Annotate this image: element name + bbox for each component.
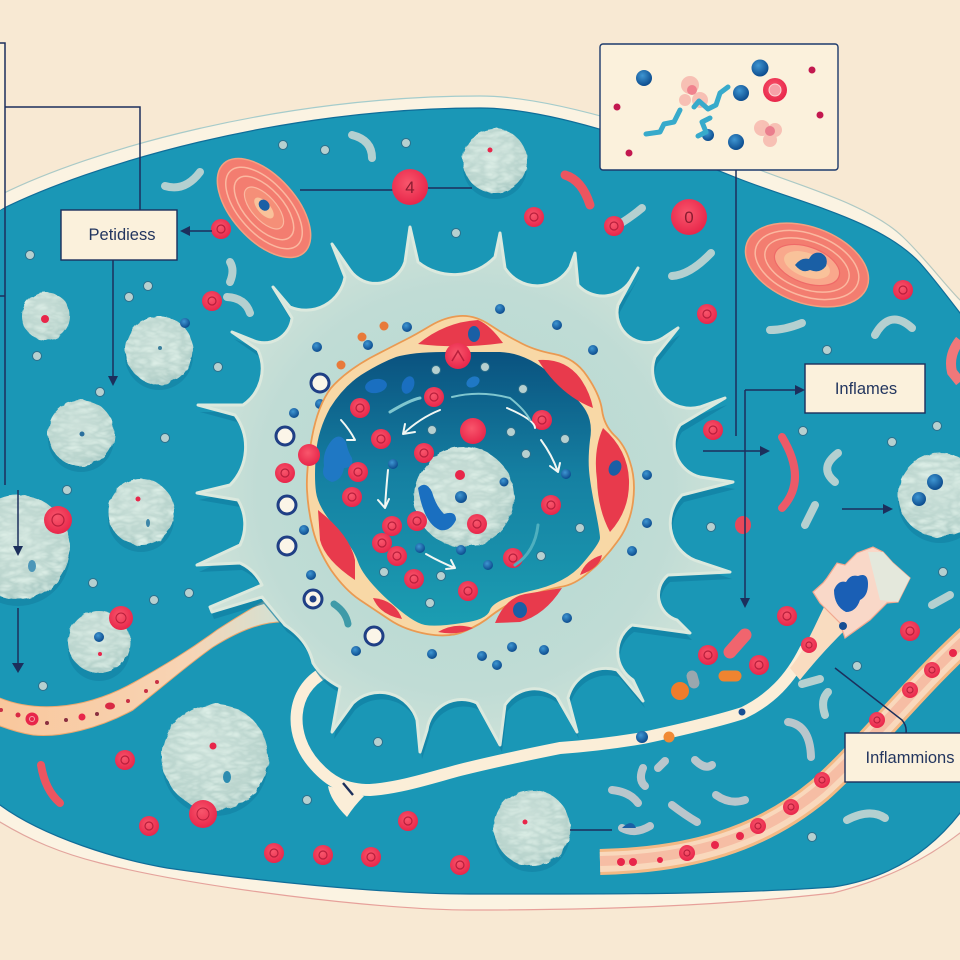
red organelles in ring bbox=[318, 320, 629, 633]
pink disc right bbox=[734, 207, 880, 323]
pink disc left bbox=[200, 142, 328, 274]
label: Petidiess: Petidiess bbox=[89, 226, 155, 244]
dots and rings on cell body bbox=[275, 304, 652, 670]
nucleus ring bbox=[307, 316, 634, 635]
label: Inflames bbox=[805, 364, 925, 413]
white blood cells bbox=[0, 129, 960, 866]
nucleus central cell bbox=[414, 447, 514, 547]
white blood cell shadows bbox=[0, 135, 960, 872]
main cell body shadow bbox=[199, 234, 735, 759]
inset panel bbox=[600, 44, 838, 170]
cell nuclei dots bbox=[28, 148, 943, 824]
numbered marker 4 bbox=[392, 169, 428, 205]
label: Inflames: Inflames bbox=[835, 380, 897, 398]
nucleus interior bbox=[315, 352, 600, 626]
peptide cluster at axon tip bbox=[801, 547, 910, 653]
red cells inside nucleus bbox=[298, 343, 584, 608]
label: Inflammions bbox=[845, 733, 960, 782]
blue blob in right disc bbox=[795, 253, 827, 271]
vessel tail left bbox=[0, 590, 290, 736]
long axon bbox=[297, 603, 850, 817]
connector lines and arrows bbox=[0, 43, 906, 830]
numbered marker 4: 4 bbox=[405, 178, 415, 197]
label: Inflammions: Inflammions bbox=[866, 749, 954, 767]
bacteria rods bbox=[41, 135, 960, 831]
numbered marker 0 bbox=[671, 199, 707, 235]
main cell body with spikes bbox=[197, 227, 733, 752]
label: Petidiess bbox=[61, 210, 177, 260]
scattered small dots bbox=[26, 138, 948, 842]
scattered red cells bbox=[44, 207, 920, 875]
top-left panel fragment bbox=[0, 43, 5, 210]
vessel bottom right bbox=[600, 631, 960, 866]
blue clusters inside nucleus bbox=[323, 326, 624, 618]
circulation arrows inside nucleus bbox=[341, 394, 560, 569]
numbered marker 0: 0 bbox=[684, 208, 694, 227]
